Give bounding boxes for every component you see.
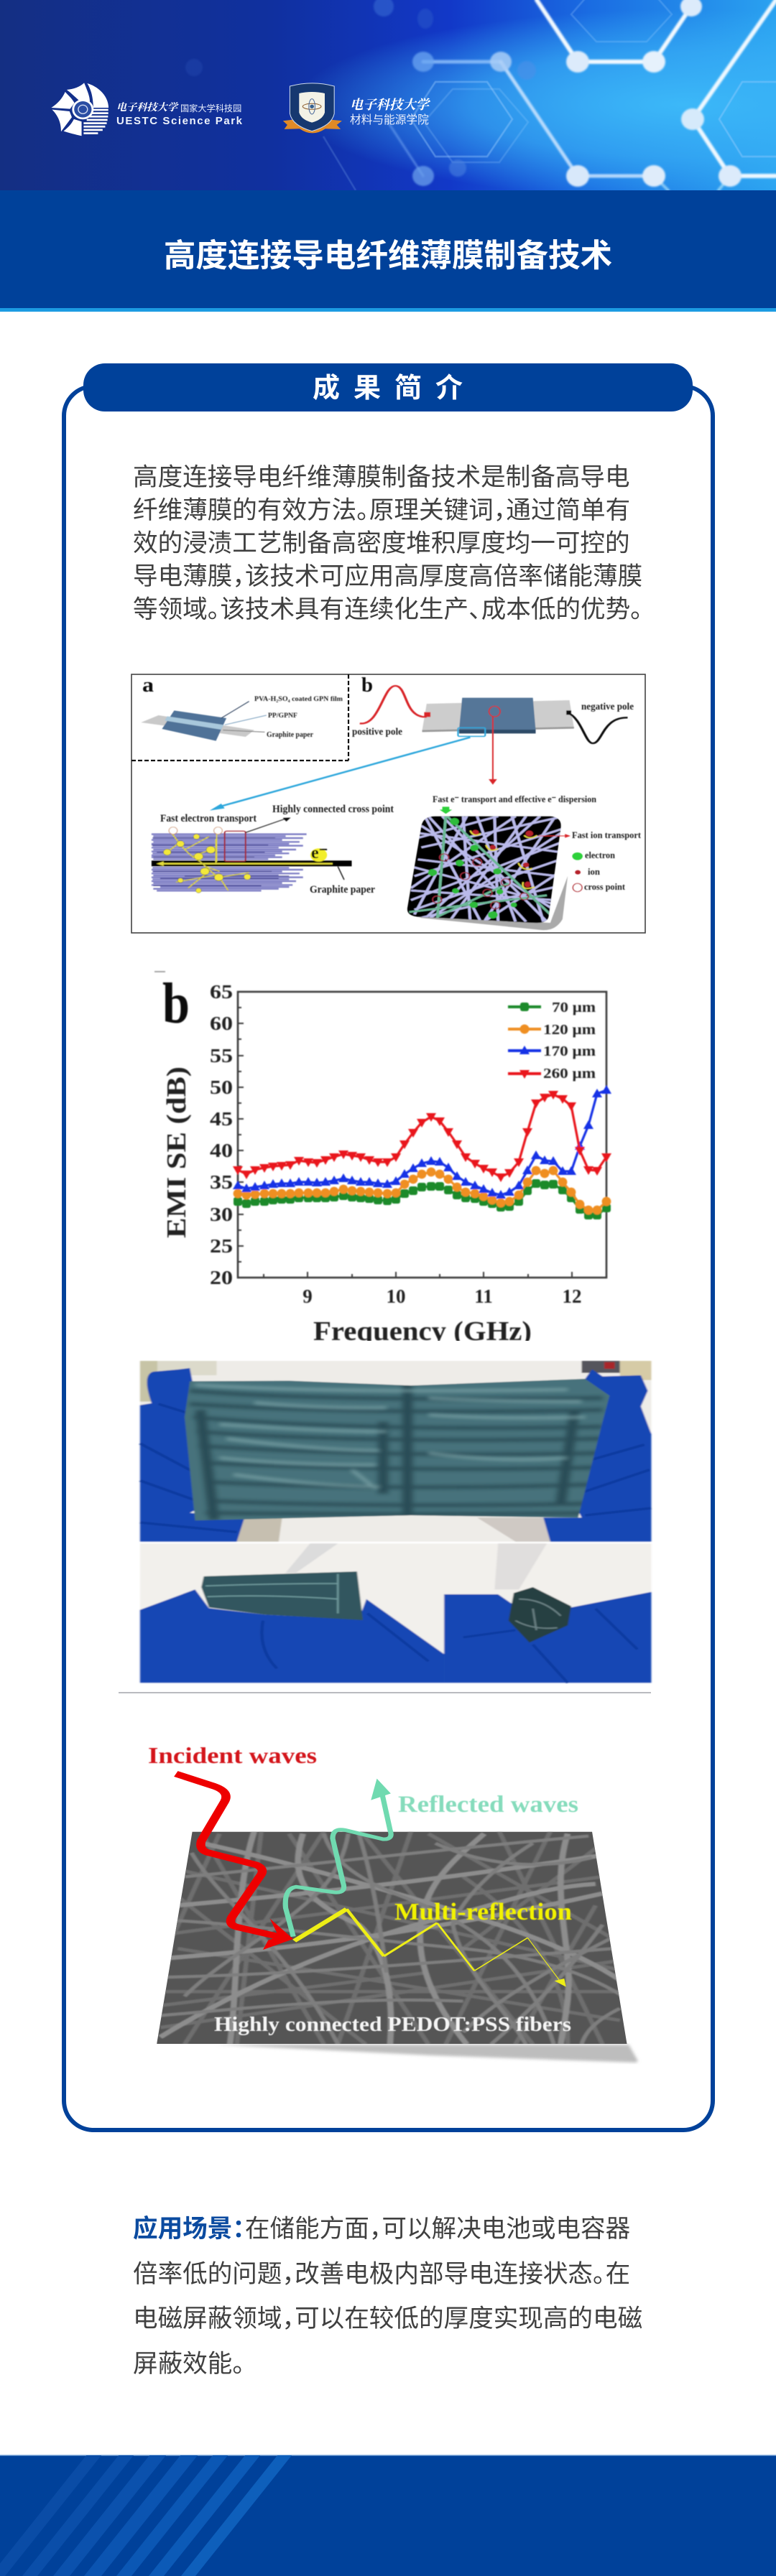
schematic labels: a — [142, 674, 154, 697]
logo: School of Materials and Energy: 电子科技大学 — [350, 95, 431, 113]
chart legend: 70 μm — [552, 1000, 596, 1015]
wave labels: Incident waves — [148, 1742, 317, 1768]
chart axes and ticks: 40 — [210, 1140, 233, 1161]
application scenario text block: ， — [369, 2208, 394, 2244]
chart: EMI SE vs frequency — [154, 970, 612, 1341]
schematic a: coated film device — [141, 702, 267, 741]
logo: School of Materials and Energy — [283, 83, 431, 133]
panel: results card outline — [62, 384, 715, 2132]
series: 70 um — [238, 1184, 606, 1215]
intro text block: 纤维薄膜的有效方法 原理关键词 通过简单有 — [133, 490, 630, 526]
intro text block: ， — [494, 490, 518, 526]
schematic labels: Fast ion transport — [572, 829, 642, 840]
footer band with diagonal stripes — [0, 2455, 776, 2576]
application scenario text block: 屏蔽效能 — [133, 2343, 232, 2379]
application scenario text block: 倍率低的问题 改善电极内部导电连接状态 在 — [133, 2254, 630, 2289]
wave labels: Multi-reflection — [394, 1899, 572, 1925]
series: 170 um — [238, 1090, 606, 1195]
title: 高度连接导电纤维薄膜制备技术 — [164, 229, 612, 276]
figure: device schematic — [131, 674, 646, 934]
chart legend: 260 μm — [543, 1066, 596, 1082]
chart axes and ticks: 60 — [210, 1013, 233, 1034]
application scenario text block: ， — [282, 2298, 307, 2334]
arrow: multi-reflection path — [295, 1909, 566, 1987]
arrow: incident waves — [176, 1774, 293, 1950]
application scenario text block: 应用场景 在储能方面 可以解决电池或电容器 — [133, 2208, 630, 2244]
chart axes and ticks — [210, 981, 606, 1307]
title band — [0, 190, 776, 312]
intro text block: 导电薄膜 该技术可应用高厚度高倍率储能薄膜 — [133, 556, 642, 592]
series: 260 um — [238, 1094, 606, 1177]
application scenario text block: ， — [282, 2254, 307, 2289]
schematic labels: negative pole — [581, 702, 634, 712]
chart axes and ticks: 65 — [210, 981, 233, 1003]
schematic labels: PVA-H₂SO₄ coated GPN film — [254, 696, 343, 703]
application scenario text block — [133, 2208, 642, 2379]
section heading pill — [83, 363, 693, 411]
intro text block: 。 — [208, 589, 232, 625]
chart axes and ticks: 9 — [302, 1285, 313, 1307]
chart legend: 120 μm — [543, 1022, 596, 1038]
intro text block — [133, 457, 655, 625]
chart axes and ticks: 11 — [474, 1285, 493, 1307]
arrow: reflected waves — [285, 1779, 391, 1937]
application scenario text block: 。 — [232, 2343, 257, 2379]
schematic labels: Fast e⁻ transport and effective e⁻ dispersion — [433, 794, 597, 804]
shadow of SEM plate — [216, 2045, 638, 2063]
axis title: y: EMI SE (dB) — [162, 1066, 192, 1238]
icon: fan emblem — [51, 83, 108, 136]
intro text block: 。 — [356, 490, 382, 526]
schematic labels: Highly connected cross point — [272, 804, 394, 815]
chart legend — [508, 1000, 596, 1082]
hexagon network lines and nodes — [185, 0, 776, 190]
wave labels: Highly connected PEDOT:PSS fibers — [214, 2014, 571, 2036]
chart axes and ticks: 45 — [210, 1108, 233, 1130]
schematic labels: cross point — [584, 881, 626, 892]
application scenario text block: ： — [232, 2208, 257, 2244]
schematic: fiber bundle on graphite paper — [152, 817, 352, 893]
intro text block: 、 — [468, 589, 494, 625]
application scenario text block: 。 — [593, 2254, 618, 2289]
intro text block: 效的浸渍工艺制备高密度堆积厚度均一可控的 — [133, 523, 630, 559]
photo: film rolled — [140, 1543, 651, 1683]
schematic labels — [142, 674, 642, 896]
chart axes and ticks: 30 — [210, 1204, 233, 1225]
panel letter: b — [162, 972, 190, 1036]
logo text: 电子科技大学 — [116, 100, 179, 114]
logo: UESTC Science Park — [51, 83, 243, 136]
series: 120 um — [238, 1171, 606, 1210]
schematic labels: Graphite paper — [310, 884, 376, 896]
chart axes and ticks: 12 — [562, 1285, 582, 1307]
photo: film stretched — [140, 1361, 651, 1542]
application scenario text block: 电磁屏蔽领域 可以在较低的厚度实现高的电磁 — [133, 2298, 642, 2334]
schematic: fiber network panel — [404, 806, 583, 930]
schematic labels: b — [361, 674, 373, 697]
chart axes and ticks: 20 — [210, 1267, 233, 1288]
schematic labels: Fast electron transport — [160, 813, 257, 824]
wave labels: Reflected waves — [398, 1792, 578, 1818]
logo: School of Materials and Energy: 材料与能源学院 — [350, 111, 429, 127]
chart axes and ticks: 35 — [210, 1171, 233, 1193]
photos: flexible film held in gloves — [119, 1360, 652, 1693]
chart axes and ticks: 50 — [210, 1077, 233, 1098]
intro text block: 等领域 该技术具有连续化生产 成本低的优势 — [133, 589, 630, 625]
schematic labels: ion — [588, 866, 601, 877]
diagram: wave reflection on fiber mat — [148, 1742, 639, 2064]
chart axes and ticks: 55 — [210, 1045, 233, 1066]
schematic labels: positive pole — [352, 727, 402, 738]
intro text block: ， — [232, 556, 257, 592]
schematic labels: Graphite paper — [267, 731, 314, 739]
schematic labels: PP/GPNF — [268, 712, 297, 720]
wave labels — [148, 1742, 578, 2036]
schematic labels: e⁻ — [311, 844, 328, 862]
chart axes and ticks: 25 — [210, 1235, 233, 1257]
schematic labels: electron — [585, 850, 616, 860]
intro text block: 。 — [630, 589, 655, 625]
chart legend: 170 μm — [543, 1043, 596, 1059]
intro text block: 高度连接导电纤维薄膜制备技术是制备高导电 — [133, 457, 630, 493]
schematic b: poles and signal curves — [210, 686, 627, 811]
header banner with hexagon network — [0, 0, 776, 190]
faint hexagons — [323, 0, 776, 190]
icon: shield emblem — [283, 83, 342, 133]
logo: UESTC Science Park: UESTC Science Park — [116, 115, 243, 127]
SEM image of fibers — [149, 1774, 637, 2047]
section heading text: 成果简介 — [313, 366, 476, 405]
chart axes and ticks: 10 — [387, 1285, 405, 1307]
logo: UESTC Science Park: 国家大学科技园 — [180, 101, 241, 114]
